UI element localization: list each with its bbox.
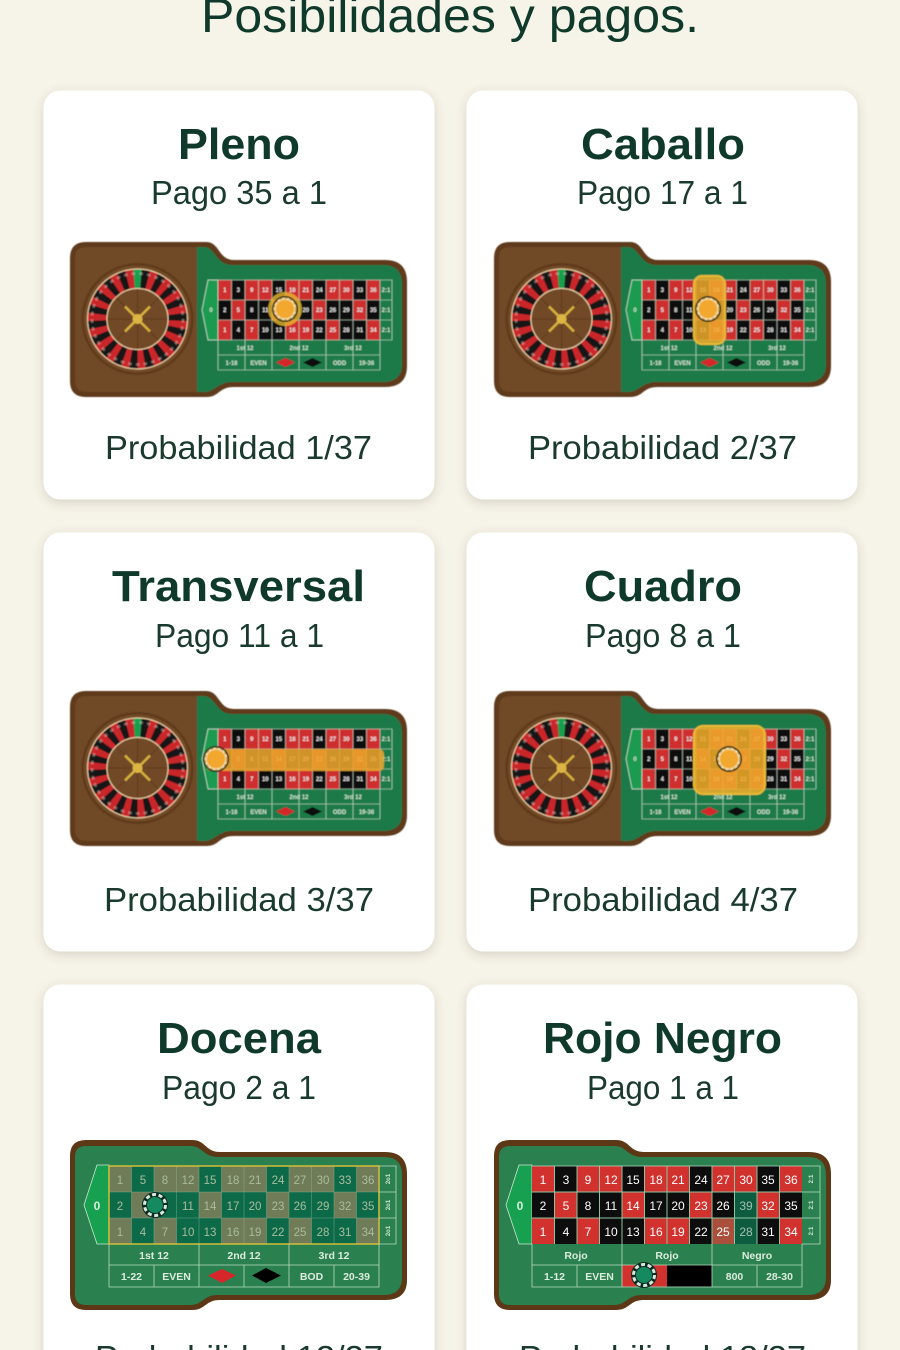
roulette table: Docena: 16	[227, 1227, 239, 1239]
roulette table: Rojo Negro: 18	[649, 1173, 663, 1187]
roulette table: Rojo Negro: 30	[739, 1173, 753, 1187]
roulette table: Rojo Negro: 9	[585, 1173, 592, 1187]
heading: Cuadro: Cuadro	[584, 562, 742, 611]
roulette table: Docena: 24	[272, 1175, 285, 1187]
roulette table: Rojo Negro: 7	[585, 1225, 592, 1239]
probability: Cuadro: Probabilidad 4/37	[528, 881, 798, 918]
roulette table: Docena: 1	[117, 1175, 123, 1187]
roulette table: Docena: 2	[117, 1201, 123, 1213]
roulette table: Rojo Negro: 2:1	[809, 1226, 815, 1235]
panel: Docena	[44, 984, 434, 1350]
heading: Transversal: Transversal	[112, 562, 365, 611]
roulette table: Docena: 5	[140, 1175, 146, 1187]
roulette table: Rojo Negro: 36	[784, 1173, 798, 1187]
roulette table: Rojo Negro: 1	[540, 1225, 547, 1239]
roulette table: Docena: 2o1	[386, 1173, 392, 1184]
roulette table: Rojo Negro: 15	[626, 1173, 640, 1187]
roulette table: Rojo Negro: Rojo	[564, 1250, 588, 1262]
roulette table: Pleno	[70, 242, 407, 397]
roulette table: Rojo Negro: 800	[726, 1271, 743, 1283]
payout: Caballo: Pago 17 a 1	[577, 174, 748, 211]
roulette table: Rojo Negro: 24	[694, 1173, 708, 1187]
panel: Cuadro	[466, 532, 858, 952]
roulette table: Docena: 1st 12	[139, 1250, 169, 1262]
roulette table: Rojo Negro: 12	[604, 1173, 618, 1187]
roulette table: Docena: 34	[362, 1227, 375, 1239]
roulette table: Docena: 7	[162, 1227, 168, 1239]
heading: Caballo: Caballo	[581, 120, 745, 169]
roulette table: Docena: 33	[339, 1175, 351, 1187]
heading: Docena: Docena	[157, 1014, 322, 1063]
chip	[142, 1192, 168, 1218]
roulette table: Rojo Negro: 28-30	[766, 1271, 793, 1283]
roulette table: Rojo Negro: EVEN	[585, 1271, 614, 1283]
roulette table: Rojo Negro: 21	[671, 1173, 685, 1187]
roulette table: Docena: 2o1	[386, 1199, 392, 1210]
roulette table: Rojo Negro: 4	[563, 1225, 570, 1239]
roulette table: Docena: 22	[272, 1227, 284, 1239]
roulette table: Docena: 21	[249, 1175, 261, 1187]
probability: Pleno: Probabilidad 1/37	[105, 429, 372, 466]
panel: Pleno	[44, 90, 434, 500]
roulette table: Rojo Negro	[494, 1140, 831, 1310]
roulette table: Docena: 26	[294, 1201, 306, 1213]
roulette table: Rojo Negro: 26	[716, 1199, 730, 1213]
roulette table: Docena: 1-22	[121, 1271, 142, 1283]
roulette table: Docena: 30	[317, 1175, 329, 1187]
roulette table: Rojo Negro: 25	[716, 1225, 730, 1239]
roulette table: Docena: BOD	[300, 1271, 324, 1283]
roulette table: Rojo Negro: Negro	[742, 1250, 772, 1262]
payout: Cuadro: Pago 8 a 1	[585, 617, 741, 654]
roulette table: Docena: 13	[204, 1227, 216, 1239]
roulette table: Docena: 8	[162, 1175, 168, 1187]
probability: Transversal: Probabilidad 3/37	[104, 881, 374, 918]
roulette table: Rojo Negro: 2:1	[809, 1200, 815, 1209]
roulette table: Docena: 1	[117, 1227, 123, 1239]
roulette table: Rojo Negro: 13	[626, 1225, 640, 1239]
roulette table: Docena: 32	[339, 1201, 351, 1213]
roulette table: Docena: 3rd 12	[319, 1250, 350, 1262]
roulette table: Rojo Negro: 20	[671, 1199, 685, 1213]
roulette table: Docena: 0	[94, 1199, 101, 1213]
roulette table: Rojo Negro: 32	[761, 1199, 775, 1213]
chip	[631, 1262, 657, 1288]
payout: Transversal: Pago 11 a 1	[155, 617, 324, 654]
roulette table: Docena: 17	[227, 1201, 239, 1213]
roulette table: Docena: 12	[182, 1175, 194, 1187]
roulette table: Rojo Negro: 28	[739, 1225, 753, 1239]
roulette table: Docena: 14	[204, 1201, 217, 1213]
roulette table: Docena: 31	[339, 1227, 351, 1239]
heading: Rojo Negro: Rojo Negro	[543, 1014, 782, 1063]
roulette table: Rojo Negro: 31	[761, 1225, 775, 1239]
roulette table: Docena: 35	[362, 1201, 374, 1213]
roulette table: Docena: 25	[294, 1227, 306, 1239]
roulette table: Rojo Negro: 35	[784, 1199, 798, 1213]
roulette table: Rojo Negro: 11	[605, 1199, 618, 1213]
roulette table: Rojo Negro: 14	[626, 1199, 640, 1213]
payout: Rojo Negro: Pago 1 a 1	[587, 1069, 739, 1106]
roulette table: Docena: 4	[140, 1227, 147, 1239]
roulette table: Docena: 15	[204, 1175, 216, 1187]
roulette table: Rojo Negro: 1	[540, 1173, 547, 1187]
roulette table: Rojo Negro: 27	[716, 1173, 730, 1187]
roulette table: Rojo Negro: 8	[585, 1199, 592, 1213]
roulette table: Docena: 2o1	[386, 1225, 392, 1236]
roulette table: Docena: 27	[294, 1175, 306, 1187]
roulette table: Docena: 20-39	[343, 1271, 370, 1283]
roulette table: Rojo Negro: 16	[649, 1225, 663, 1239]
payout: Docena: Pago 2 a 1	[162, 1069, 316, 1106]
roulette table: Rojo Negro: 5	[563, 1199, 570, 1213]
roulette table: Docena: 10	[182, 1227, 194, 1239]
panel: Transversal	[44, 532, 434, 952]
roulette table: Rojo Negro: 39	[739, 1199, 753, 1213]
payout: Pleno: Pago 35 a 1	[151, 174, 327, 211]
roulette table: Rojo Negro: 0	[517, 1199, 524, 1213]
roulette table: Rojo Negro: 19	[671, 1225, 685, 1239]
roulette table: Rojo Negro: 10	[604, 1225, 618, 1239]
roulette table: Rojo Negro: 2	[540, 1199, 547, 1213]
panel: Rojo Negro	[466, 984, 858, 1350]
roulette table: Rojo Negro: 35	[761, 1173, 775, 1187]
roulette table: Docena: 2nd 12	[227, 1250, 261, 1262]
roulette table: Transversal	[70, 691, 407, 846]
roulette table: Docena: 29	[317, 1201, 329, 1213]
roulette table: Docena: 28	[317, 1227, 329, 1239]
roulette table: Cuadro	[494, 691, 831, 846]
roulette table: Docena: 23	[272, 1201, 284, 1213]
roulette table: Docena: 19	[249, 1227, 261, 1239]
roulette table: Rojo Negro: 3	[563, 1173, 570, 1187]
probability: Caballo: Probabilidad 2/37	[528, 429, 797, 466]
roulette table: Rojo Negro: 34	[784, 1225, 798, 1239]
roulette table: Caballo	[494, 242, 831, 397]
panel: Caballo	[466, 90, 858, 500]
roulette table: Rojo Negro: 1-12	[544, 1271, 565, 1283]
roulette table: Rojo Negro: 22	[694, 1225, 708, 1239]
roulette table: Rojo Negro: 17	[649, 1199, 663, 1213]
roulette table: Rojo Negro: Rojo	[655, 1250, 679, 1262]
roulette table: Docena: 36	[362, 1175, 374, 1187]
roulette table: Docena: 11	[182, 1201, 194, 1213]
roulette table: Docena: EVEN	[162, 1271, 191, 1283]
roulette table: Docena	[70, 1140, 407, 1310]
roulette table: Rojo Negro: 23	[694, 1199, 708, 1213]
heading: Pleno: Pleno	[178, 120, 300, 169]
roulette table: Docena: 18	[227, 1175, 239, 1187]
roulette table: Docena: 20	[249, 1201, 261, 1213]
roulette table: Rojo Negro: 2:1	[809, 1174, 815, 1183]
